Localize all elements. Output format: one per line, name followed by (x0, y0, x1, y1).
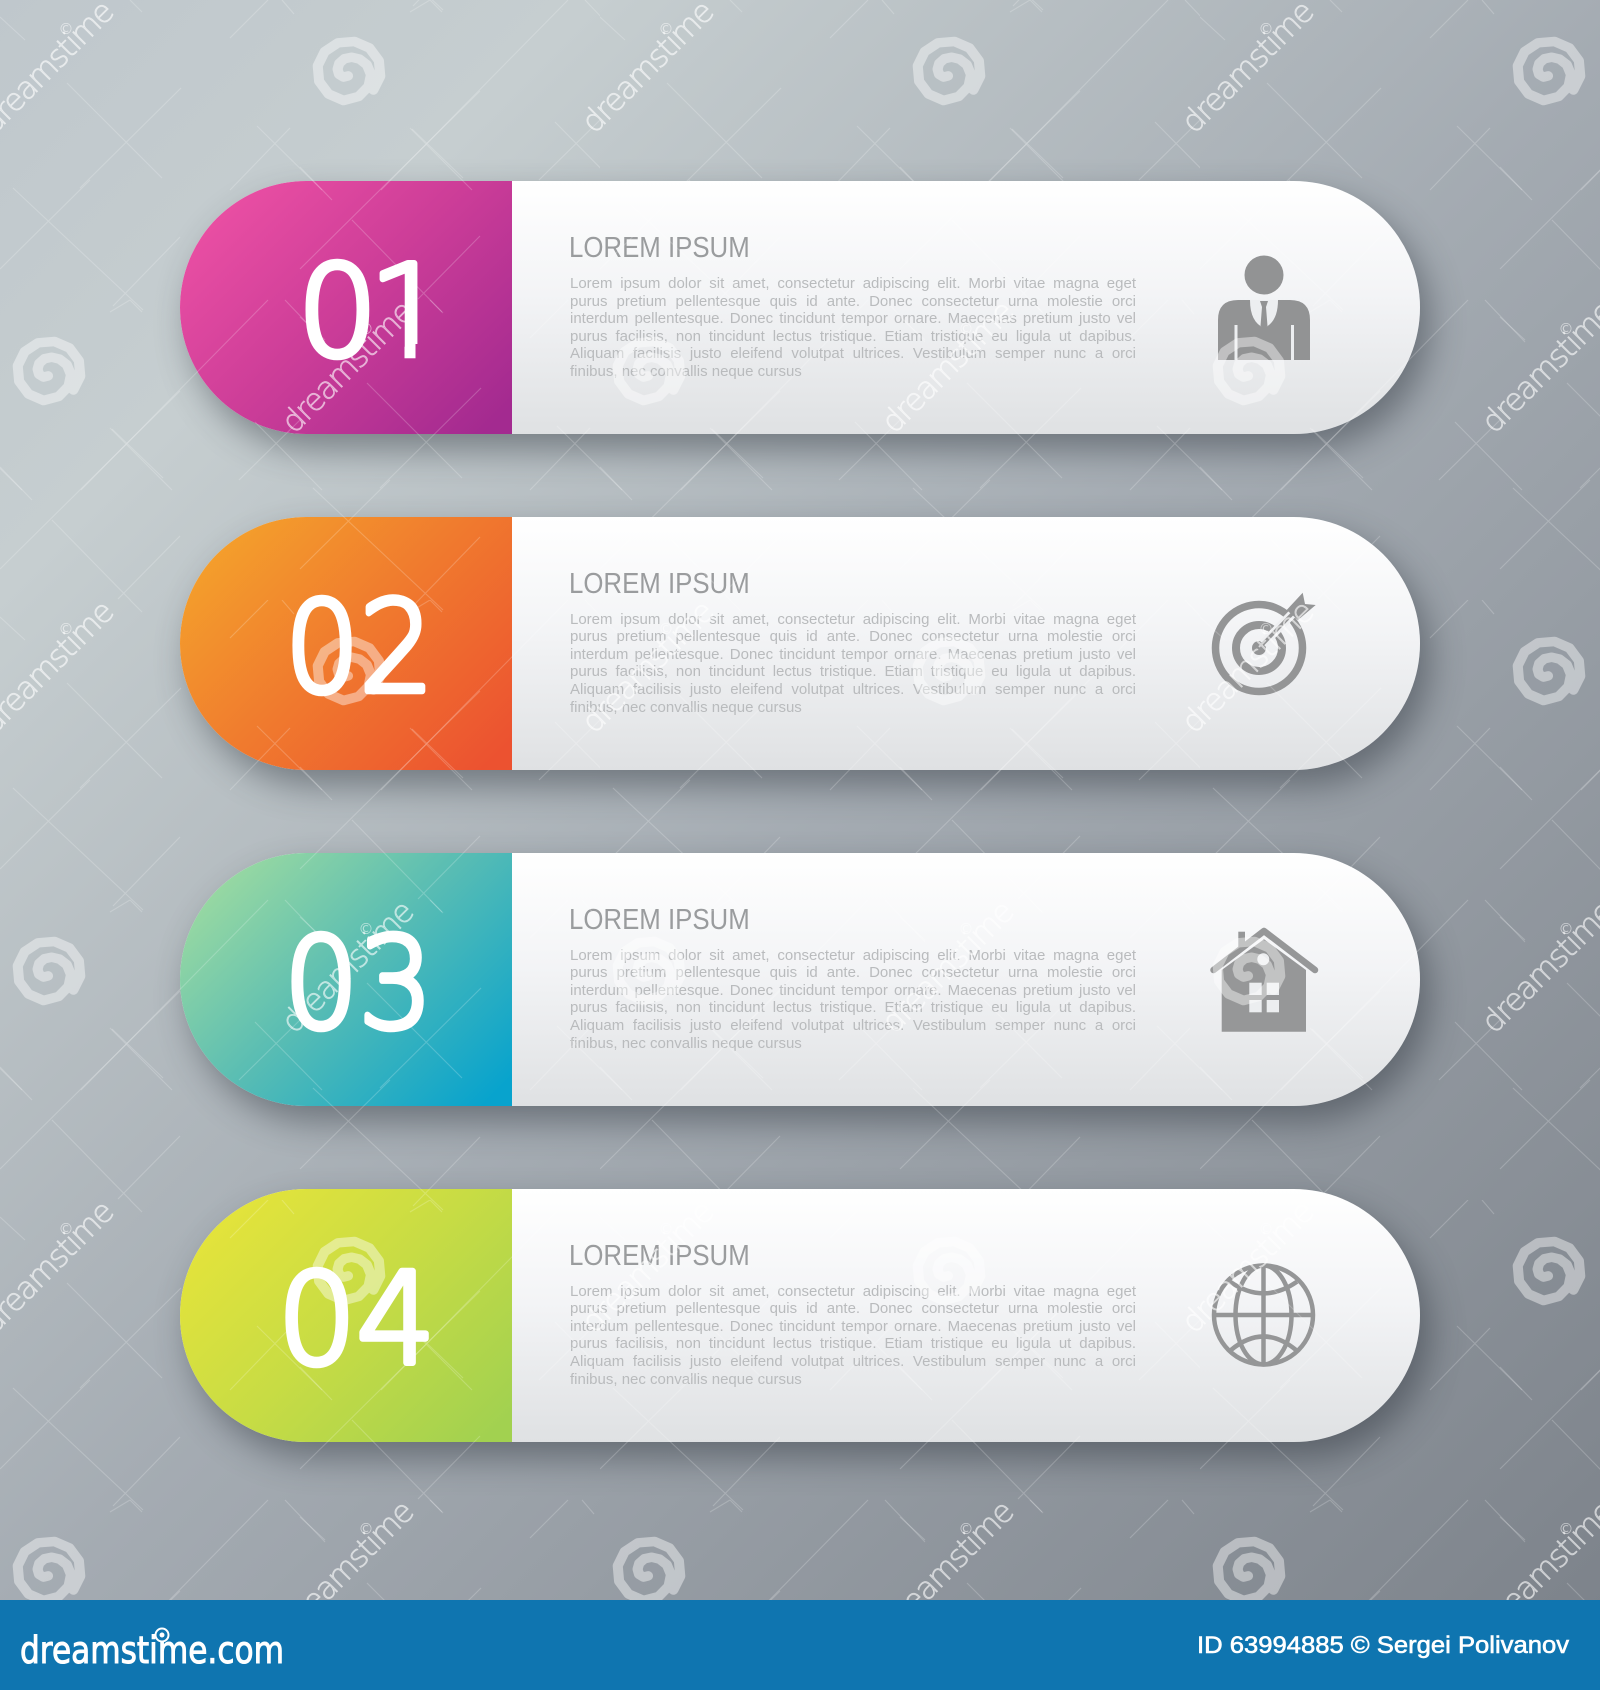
body text 01: purus pretium pellentesque quis id ante. Donec consectetur urna molestie orci (570, 293, 1136, 310)
watermark overlay: © (658, 1220, 674, 1238)
watermark overlay: © (658, 620, 674, 638)
number tab 04: 04 (278, 1246, 436, 1393)
body text 02: Aliquam facilisis justo eleifend volutpat ultrices. Vestibulum semper nunc a orci (570, 681, 1136, 698)
heading 03: LOREM IPSUM (569, 904, 750, 936)
body text 04: purus facilisis, non tincidunt lectus tristique. Etiam tristique eu ligula ut dapibus. (570, 1335, 1136, 1352)
body text 03: purus pretium pellentesque quis id ante. Donec consectetur urna molestie orci (570, 964, 1136, 981)
card 02 (180, 517, 1420, 770)
body text 03: finibus, nec convallis neque cursus (570, 1035, 802, 1052)
number tab 03 (180, 853, 512, 1106)
body text 02: purus pretium pellentesque quis id ante. Donec consectetur urna molestie orci (570, 628, 1136, 645)
body text 02 (570, 611, 1136, 716)
watermark overlay: dreamstime (874, 893, 1021, 1040)
body text 01: interdum pellentesque. Donec tincidunt tempor ornare. Maecenas pretium justo vel (570, 310, 1136, 327)
watermark overlay: © (658, 20, 674, 38)
body text 04 (570, 1283, 1136, 1388)
watermark overlay: dreamstime (1174, 1193, 1321, 1340)
number tab 01: 0 (298, 238, 378, 385)
body text 02: Lorem ipsum dolor sit amet, consectetur adipiscing elit. Morbi vitae magna eget (570, 611, 1136, 628)
heading 02: LOREM IPSUM (569, 568, 750, 600)
watermark overlay: © (1258, 620, 1274, 638)
body text 01: finibus, nec convallis neque cursus (570, 363, 802, 380)
number tab 01 (180, 181, 512, 434)
watermark overlay: © (58, 20, 74, 38)
body text 01: Aliquam facilisis justo eleifend volutpat ultrices. Vestibulum semper nunc a orci (570, 345, 1136, 362)
watermark overlay: © (358, 920, 374, 938)
body text 03: Aliquam facilisis justo eleifend volutpat ultrices. Vestibulum semper nunc a orci (570, 1017, 1136, 1034)
body text 02: interdum pellentesque. Donec tincidunt tempor ornare. Maecenas pretium justo vel (570, 646, 1136, 663)
body text 04: finibus, nec convallis neque cursus (570, 1371, 802, 1388)
number tab 02: 02 (285, 574, 434, 721)
body text 04: Lorem ipsum dolor sit amet, consectetur adipiscing elit. Morbi vitae magna eget (570, 1283, 1136, 1300)
body text 03: interdum pellentesque. Donec tincidunt tempor ornare. Maecenas pretium justo vel (570, 982, 1136, 999)
icon: target with arrow (1212, 592, 1316, 696)
body text 01: Lorem ipsum dolor sit amet, consectetur adipiscing elit. Morbi vitae magna eget (570, 275, 1136, 292)
footer bar: dreamstime.com (20, 1629, 284, 1672)
body text 03: purus facilisis, non tincidunt lectus tristique. Etiam tristique eu ligula ut dapibus. (570, 999, 1136, 1016)
body text 01: purus facilisis, non tincidunt lectus tristique. Etiam tristique eu ligula ut dapibus. (570, 328, 1136, 345)
heading 04: LOREM IPSUM (569, 1240, 750, 1272)
watermark overlay: dreamstime (274, 893, 421, 1040)
watermark overlay: © (958, 320, 974, 338)
body text 03: Lorem ipsum dolor sit amet, consectetur adipiscing elit. Morbi vitae magna eget (570, 947, 1136, 964)
watermark overlay: dreamstime (574, 1193, 721, 1340)
watermark overlay: © (958, 1520, 974, 1538)
number tab 04 (180, 1189, 512, 1442)
body text 04: interdum pellentesque. Donec tincidunt tempor ornare. Maecenas pretium justo vel (570, 1318, 1136, 1335)
footer bar: ID 63994885 © Sergei Polivanov (1197, 1632, 1569, 1659)
watermark overlay: © (358, 1520, 374, 1538)
watermark overlay: dreamstime (874, 293, 1021, 440)
watermark overlay: © (1558, 920, 1574, 938)
watermark overlay: dreamstime (274, 293, 421, 440)
watermark overlay: © (1558, 320, 1574, 338)
watermark overlay: dreamstime (1174, 593, 1321, 740)
icon: globe (1212, 1263, 1316, 1367)
body text 03 (570, 947, 1136, 1052)
watermark overlay: © (358, 320, 374, 338)
watermark overlay: dreamstime (574, 593, 721, 740)
number tab 03: 03 (284, 910, 433, 1057)
watermark overlay: © (1258, 1220, 1274, 1238)
footer bar (0, 1600, 1600, 1690)
body text 04: purus pretium pellentesque quis id ante. Donec consectetur urna molestie orci (570, 1300, 1136, 1317)
number tab 02 (180, 517, 512, 770)
icon: businessman (1218, 256, 1310, 360)
icon: house (1210, 928, 1318, 1032)
watermark overlay: © (58, 1220, 74, 1238)
number tab 01: 1 (369, 238, 449, 385)
body text 04: Aliquam facilisis justo eleifend volutpat ultrices. Vestibulum semper nunc a orci (570, 1353, 1136, 1370)
watermark overlay: © (1558, 1520, 1574, 1538)
card 04 (180, 1189, 1420, 1442)
body text 02: purus facilisis, non tincidunt lectus tristique. Etiam tristique eu ligula ut dapibus. (570, 663, 1136, 680)
body text 02: finibus, nec convallis neque cursus (570, 699, 802, 716)
card 03 (180, 853, 1420, 1106)
watermark overlay: © (58, 620, 74, 638)
body text 01 (570, 275, 1136, 380)
watermark overlay: © (958, 920, 974, 938)
heading 01: LOREM IPSUM (569, 232, 750, 264)
watermark overlay: © (1258, 20, 1274, 38)
card 01 (180, 181, 1420, 434)
